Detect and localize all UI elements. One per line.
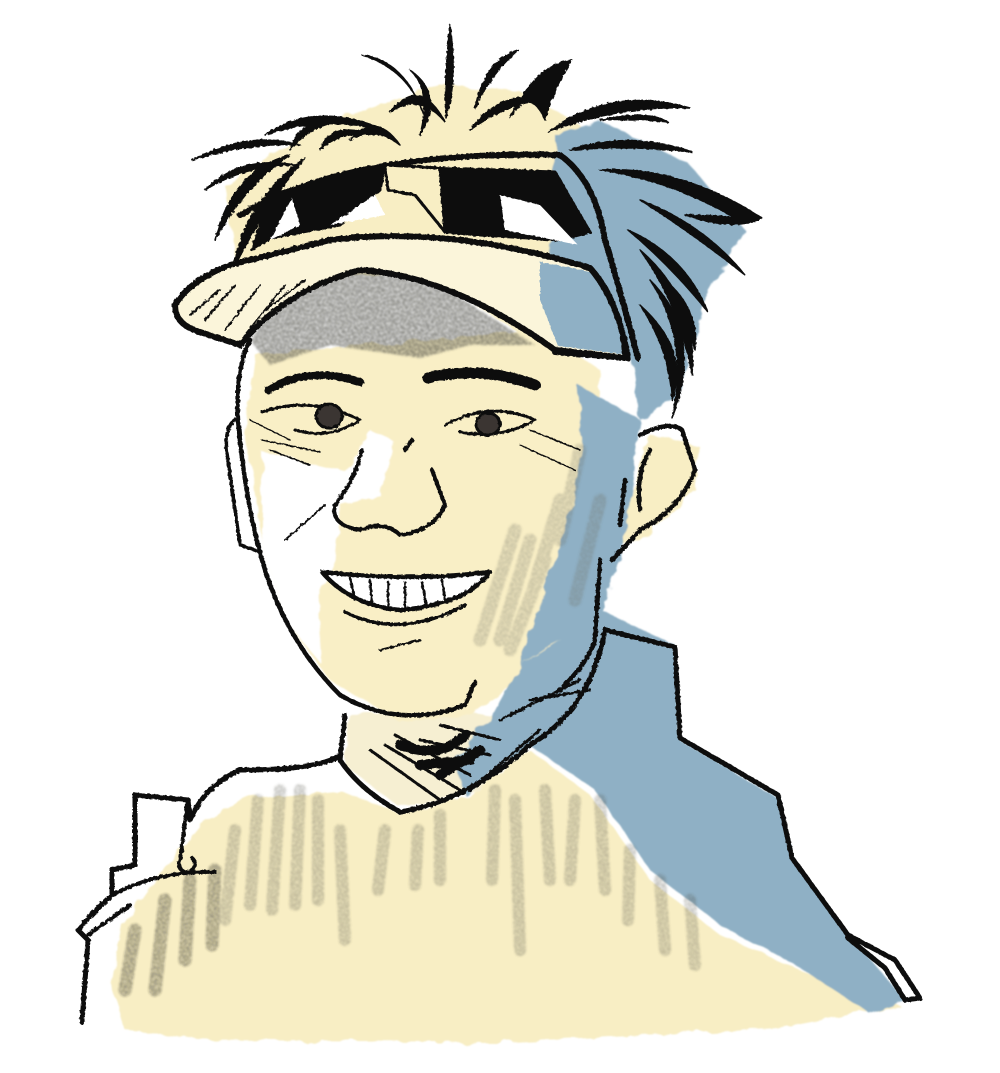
neck xyxy=(340,630,605,812)
blue wash: face shadow xyxy=(520,385,640,665)
yellow wash: body xyxy=(112,750,900,1042)
shoulder outline left xyxy=(78,755,340,1022)
visor xyxy=(175,236,628,358)
sunglasses on head xyxy=(240,155,638,358)
blue wash: hair xyxy=(540,120,745,420)
darker sleeve shading xyxy=(125,870,215,990)
yellow wash: hair and visor xyxy=(178,85,600,340)
blue shade on visor xyxy=(540,262,622,354)
collar loop and sleeve line xyxy=(88,800,215,935)
cheek shading xyxy=(480,450,600,650)
hair strands xyxy=(192,25,762,418)
shoulder outline right xyxy=(605,630,920,1000)
yellow wash: ear xyxy=(610,435,698,548)
sweater shading strokes xyxy=(225,790,695,965)
face outline xyxy=(238,340,600,715)
eyebrows xyxy=(268,373,535,390)
colour washes xyxy=(112,85,905,1042)
yellow wash: face xyxy=(245,330,600,722)
forehead shadow xyxy=(250,270,535,365)
white highlight on cheek xyxy=(262,430,392,665)
smile xyxy=(285,505,490,650)
eyes xyxy=(250,404,580,470)
nose xyxy=(334,440,445,535)
yellow wash: neck xyxy=(345,712,520,808)
ink linework xyxy=(78,25,920,1022)
blue wash: neck and shoulder xyxy=(455,610,905,1012)
ear right xyxy=(612,426,695,560)
pencil shading xyxy=(125,270,695,990)
ear left xyxy=(226,418,260,552)
